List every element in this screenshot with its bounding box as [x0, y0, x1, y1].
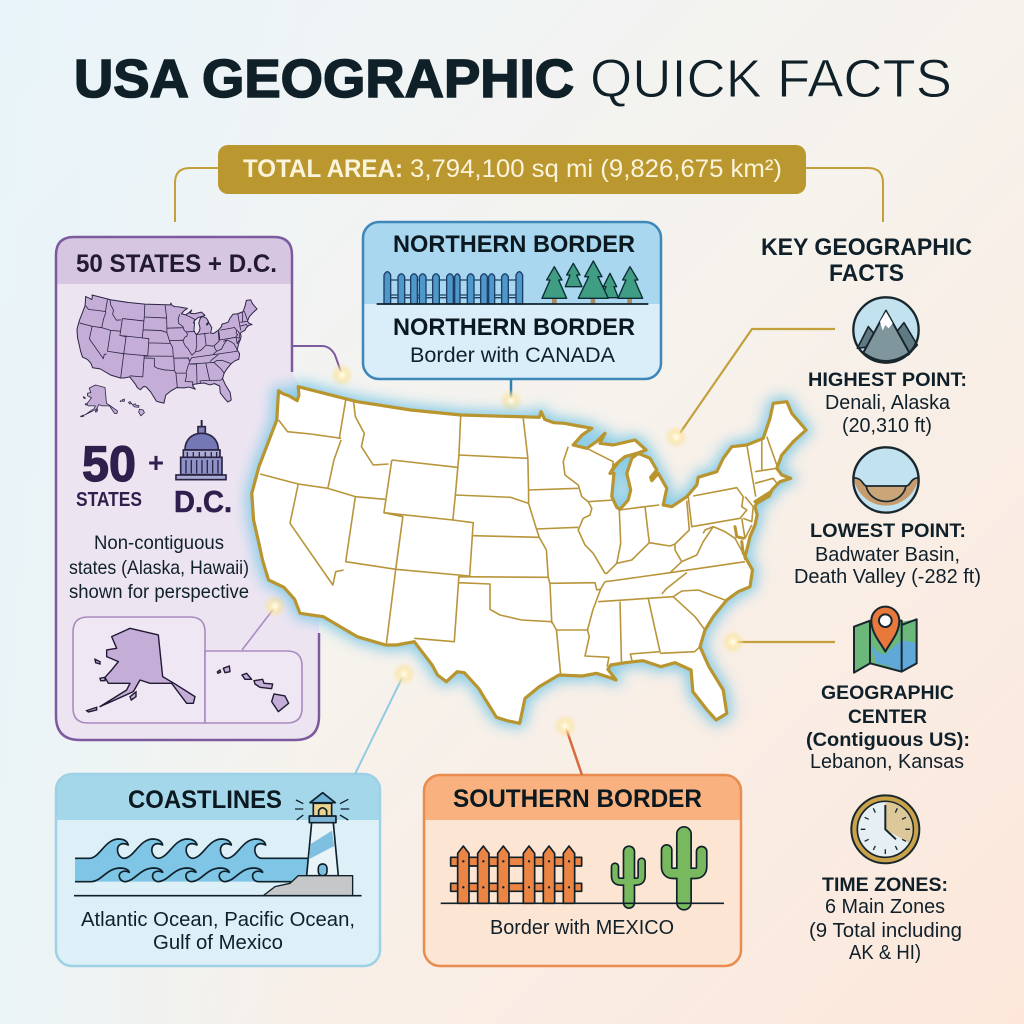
- plus sign: +: [148, 447, 164, 478]
- northern subheading: NORTHERN BORDER: [393, 314, 635, 341]
- northern heading: NORTHERN BORDER: [393, 231, 635, 258]
- inset: Alaska: [73, 617, 205, 723]
- icon: map pin: [854, 607, 917, 673]
- note text: [69, 532, 249, 603]
- icon: basin: [853, 447, 919, 513]
- lowest point text: Death Valley (-282 ft): [794, 566, 981, 588]
- key facts heading: FACTS: [829, 260, 904, 287]
- panel: 50 states + D.C.: [56, 237, 319, 740]
- lowest point text: [794, 521, 981, 588]
- time zones text: AK & HI): [849, 942, 921, 964]
- inset: Hawaii: [205, 651, 302, 723]
- total area banner: 3,794,100 sq mi (9,826,675 km²): [410, 155, 782, 183]
- D.C. label: D.C.: [174, 484, 232, 519]
- panel heading: 50 STATES + D.C.: [76, 250, 277, 278]
- icon: waves and lighthouse: [74, 793, 362, 896]
- mini US map: [77, 295, 257, 403]
- coastlines text: Gulf of Mexico: [153, 932, 283, 954]
- note text: Non-contiguous: [94, 532, 224, 554]
- title: USA GEOGRAPHIC: [74, 49, 574, 109]
- title: QUICK FACTS: [590, 49, 952, 109]
- connector: northern border: [499, 379, 523, 413]
- key facts heading: [761, 234, 972, 287]
- icon: capitol: [176, 420, 226, 480]
- connector: states to map: [292, 346, 354, 387]
- 50 states count: [76, 436, 142, 511]
- title: [74, 49, 952, 109]
- connector: Hawaii inset: [242, 594, 287, 650]
- key facts heading: KEY GEOGRAPHIC: [761, 234, 972, 261]
- 50 states count: 50: [82, 436, 136, 492]
- northern text: Border with CANADA: [410, 344, 615, 367]
- icon: northern fence and trees: [377, 261, 648, 304]
- highest point text: Denali, Alaska: [825, 392, 951, 414]
- connector: coastlines: [355, 662, 416, 774]
- highest point text: HIGHEST POINT:: [808, 370, 967, 391]
- time zones text: TIME ZONES:: [822, 875, 948, 896]
- mini Alaska: [81, 385, 117, 417]
- geographic center text: (Contiguous US):: [806, 730, 970, 751]
- icon: clock: [851, 795, 919, 863]
- key facts column: [761, 234, 981, 964]
- coastlines heading: COASTLINES: [128, 786, 282, 814]
- highest point text: (20,310 ft): [842, 415, 932, 437]
- icon: mountain: [853, 297, 919, 363]
- note text: states (Alaska, Hawaii): [69, 557, 249, 579]
- geographic center text: CENTER: [848, 707, 927, 728]
- map glow: [252, 387, 806, 723]
- southern heading: SOUTHERN BORDER: [453, 785, 702, 813]
- connector: key facts to highest point: [664, 329, 835, 449]
- coastlines text: [81, 909, 355, 954]
- 50 states count: STATES: [76, 489, 142, 511]
- main US map: [252, 387, 806, 723]
- coastlines text: Atlantic Ocean, Pacific Ocean,: [81, 909, 355, 931]
- connector: southern border: [553, 714, 582, 775]
- geographic center text: Lebanon, Kansas: [810, 751, 964, 773]
- southern text: Border with MEXICO: [490, 917, 674, 939]
- time zones text: (9 Total including: [809, 920, 962, 942]
- geographic center text: [806, 683, 970, 773]
- total area banner: [175, 145, 883, 222]
- time zones text: 6 Main Zones: [825, 896, 945, 918]
- time zones text: [809, 875, 962, 964]
- panel: coastlines: [56, 774, 380, 966]
- panel: southern border: [424, 775, 741, 966]
- total area banner: TOTAL AREA:: [243, 155, 403, 183]
- geographic center text: GEOGRAPHIC: [821, 683, 954, 704]
- highest point text: [808, 370, 967, 437]
- icon: southern fence and cacti: [441, 834, 724, 903]
- lowest point text: LOWEST POINT:: [810, 521, 966, 542]
- mini Hawaii: [120, 399, 144, 416]
- panel: northern border: [363, 222, 661, 379]
- note text: shown for perspective: [69, 581, 249, 603]
- lowest point text: Badwater Basin,: [815, 544, 960, 566]
- connector: key facts to geographic center: [721, 630, 835, 654]
